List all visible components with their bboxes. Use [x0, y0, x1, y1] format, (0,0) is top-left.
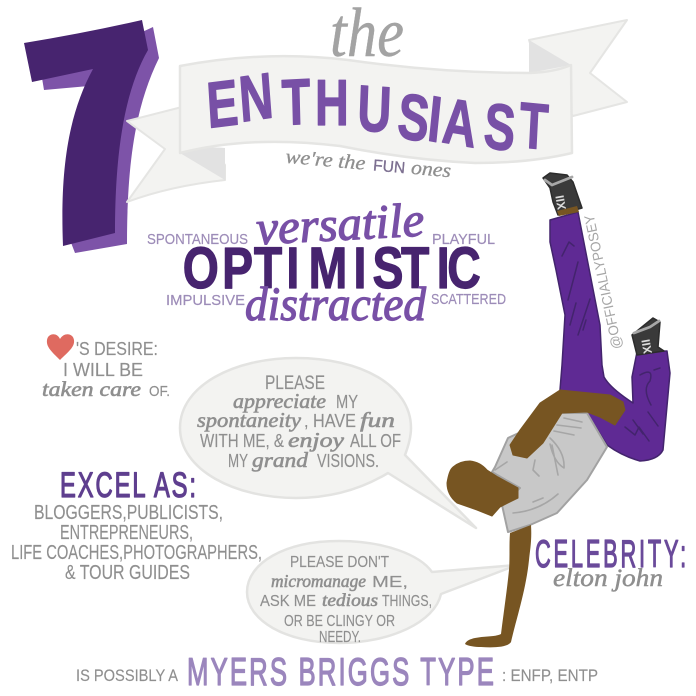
speech bubble: appreciate: , HAVE [304, 411, 356, 431]
trait: optimistic: OPTIMISTIC [183, 236, 481, 301]
celebrity [535, 531, 686, 592]
trait: impulsive: IMPULSIVE [166, 292, 245, 309]
speech bubble: appreciate: MY [228, 451, 248, 471]
speech bubble: appreciate: VISIONS. [317, 451, 379, 471]
excel as list: BLOGGERS,PUBLICISTS, [34, 502, 223, 524]
lower shoe [632, 318, 664, 355]
myers briggs footer: IS POSSIBLY A [76, 666, 179, 685]
speech bubble: don't: PLEASE DON'T [290, 554, 389, 571]
myers briggs footer [76, 651, 598, 694]
ribbon left tail [127, 107, 225, 202]
traits word cloud [147, 194, 506, 331]
shirt fold lines [495, 418, 582, 513]
speech bubble: appreciate: MY [336, 392, 358, 412]
trait: spontaneous: SPONTANEOUS [147, 231, 248, 248]
handstand figure [447, 173, 670, 647]
big number 7 [24, 20, 159, 253]
excel as list [11, 467, 262, 584]
trait: scattered: SCATTERED [431, 291, 506, 308]
speech bubble: appreciate: PLEASE [265, 373, 325, 394]
bent arm [510, 390, 625, 458]
speech bubble: appreciate: grand [252, 448, 309, 472]
purple pants [550, 212, 670, 461]
ribbon right fold [529, 40, 571, 73]
ribbon left fold [180, 148, 225, 180]
pant fold lines [562, 242, 660, 441]
speech bubble: don't: micromanage [271, 571, 366, 591]
speech bubble: appreciate: spontaneity [197, 408, 302, 432]
speech bubble: don't: ASK ME [260, 593, 316, 610]
speech bubble: appreciate: WITH ME, & [200, 431, 284, 451]
ribbon banner [127, 20, 627, 202]
tagline: ones [410, 157, 452, 182]
speech bubble: don't: NEEDY. [319, 629, 361, 646]
speech bubble: appreciate: ALL OF [350, 431, 401, 451]
tagline [285, 146, 452, 182]
speech bubble: don't: tedious [322, 590, 378, 610]
speech bubble: don't: OR BE CLINGY OR [284, 613, 395, 630]
name: elton john: elton john [553, 565, 663, 592]
tagline: we're the [285, 146, 366, 175]
heart's desire: OF. [149, 383, 170, 400]
tagline: FUN [372, 157, 406, 177]
lower shoe: XII [639, 338, 655, 355]
heart's desire: taken care [42, 377, 141, 401]
speech bubble: don't: THINGS, [382, 593, 432, 610]
title: ENTHUSIAST: ENTHUSIAST [205, 60, 550, 166]
upper shoe: XII [553, 194, 569, 211]
heading: excel as: EXCEL AS: [60, 467, 196, 505]
excel as list: LIFE COACHES,PHOTOGRAPHERS, [11, 542, 262, 564]
heart's desire [42, 334, 170, 401]
upper shoe [543, 173, 582, 216]
grey shirt [492, 413, 607, 532]
heading: myers briggs type: MYERS BRIGGS TYPE [187, 651, 494, 694]
myers briggs footer: : ENFP, ENTP [502, 666, 598, 685]
trait: versatile: versatile [255, 194, 425, 255]
standing arm and hand [465, 525, 531, 647]
excel as list: ENTREPRENEURS, [60, 522, 193, 544]
speech bubble: appreciate: fun [360, 408, 395, 432]
ribbon right tail [529, 20, 627, 116]
heart's desire: I WILL BE [63, 360, 143, 380]
trait: playful: PLAYFUL [432, 231, 495, 248]
heart's desire: 'S DESIRE: [76, 339, 158, 359]
heading: celebrity: CELEBRITY: [535, 531, 686, 576]
speech bubble: appreciate [180, 358, 476, 528]
icon: heart [47, 334, 74, 360]
credit handle: @OFFICIALLYPOSEY [581, 213, 625, 351]
speech bubble: don't: ME, [372, 574, 408, 591]
excel as list: & TOUR GUIDES [65, 562, 190, 584]
speech bubble: appreciate: appreciate [233, 389, 326, 413]
head [447, 461, 518, 516]
speech bubble: appreciate: enjoy [288, 428, 345, 452]
ribbon main band [180, 56, 572, 163]
trait: distracted: distracted [245, 278, 427, 331]
speech bubble: don't [247, 541, 517, 646]
